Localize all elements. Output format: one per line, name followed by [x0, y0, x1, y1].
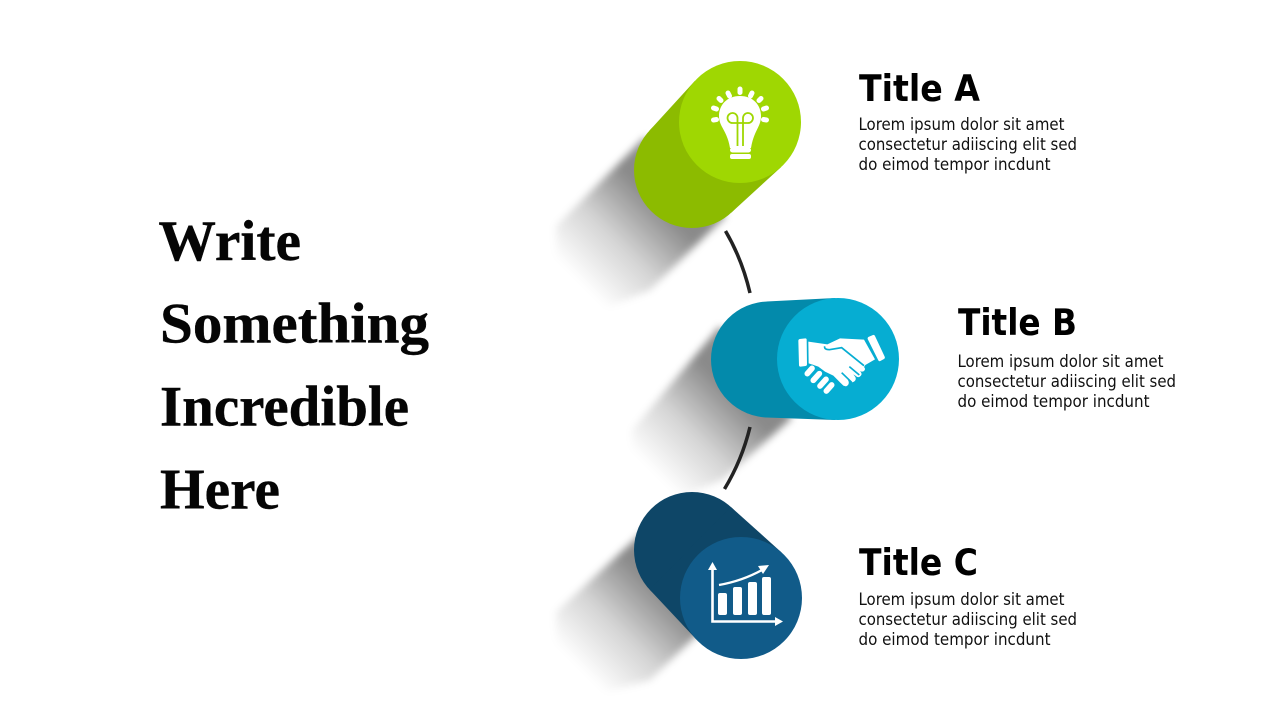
shadow C	[556, 530, 702, 692]
front face B	[777, 298, 899, 420]
text block: Title C: Title C	[859, 541, 978, 584]
connector arc: A to B	[726, 231, 750, 293]
heading: Here	[160, 458, 280, 522]
cylinder body A	[634, 81, 781, 228]
cylinder A	[556, 61, 801, 308]
text block: Title C: Lorem ipsum dolor sit amet	[858, 590, 1065, 609]
icon: handshake	[798, 335, 885, 391]
cylinder B	[632, 298, 899, 497]
text block: Title A: Lorem ipsum dolor sit amet	[858, 115, 1065, 134]
front face A	[679, 61, 801, 183]
text block: Title A: do eimod tempor incdunt	[858, 155, 1051, 174]
heading: Write	[158, 210, 301, 273]
heading: Incredible	[160, 376, 409, 438]
shadow B	[632, 326, 792, 497]
text block: Title B	[958, 301, 1176, 411]
icon: light bulb	[714, 89, 766, 159]
text block: Title C: do eimod tempor incdunt	[858, 630, 1051, 649]
heading: Something	[160, 292, 429, 356]
text block: Title A: Title A	[859, 67, 981, 110]
text block: Title B: Lorem ipsum dolor sit amet	[958, 352, 1164, 371]
text block: Title C: consectetur adiiscing elit sed	[858, 610, 1077, 629]
text block: Title B: consectetur adiiscing elit sed	[958, 372, 1176, 391]
shadow A	[556, 137, 726, 308]
front face C	[680, 537, 802, 659]
cylinder C	[556, 492, 802, 692]
connector arc: B to C	[724, 427, 750, 489]
text block: Title A	[858, 67, 1077, 174]
cylinder body B	[711, 298, 835, 420]
text block: Title B: do eimod tempor incdunt	[958, 392, 1150, 411]
text block: Title B: Title B	[958, 301, 1077, 344]
heading	[158, 210, 429, 522]
cylinder body C	[634, 492, 782, 640]
text block: Title C	[858, 541, 1077, 649]
icon: bar chart with arrow	[708, 562, 783, 626]
text block: Title A: consectetur adiiscing elit sed	[858, 135, 1077, 154]
